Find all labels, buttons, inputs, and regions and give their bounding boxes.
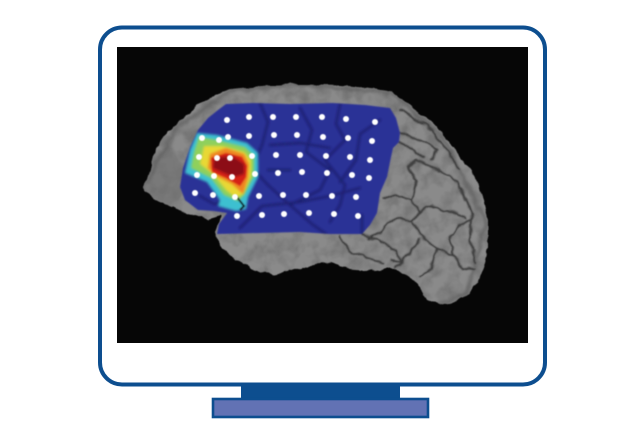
- infographic: monitor showing brain electrode heat map: [98, 26, 547, 418]
- electrodes: [192, 114, 378, 219]
- heat map: [185, 133, 258, 211]
- monitor stand neck: [241, 384, 400, 400]
- electrode grid coverage: [179, 102, 401, 235]
- monitor frame: [100, 28, 545, 384]
- lighter and darker shading: [143, 84, 486, 304]
- brain surface: [135, 80, 495, 310]
- screen: [117, 47, 528, 343]
- brain scan: [135, 80, 495, 310]
- sulci: [340, 110, 476, 276]
- grid sulci: [200, 103, 380, 234]
- monitor stand base: [213, 399, 428, 417]
